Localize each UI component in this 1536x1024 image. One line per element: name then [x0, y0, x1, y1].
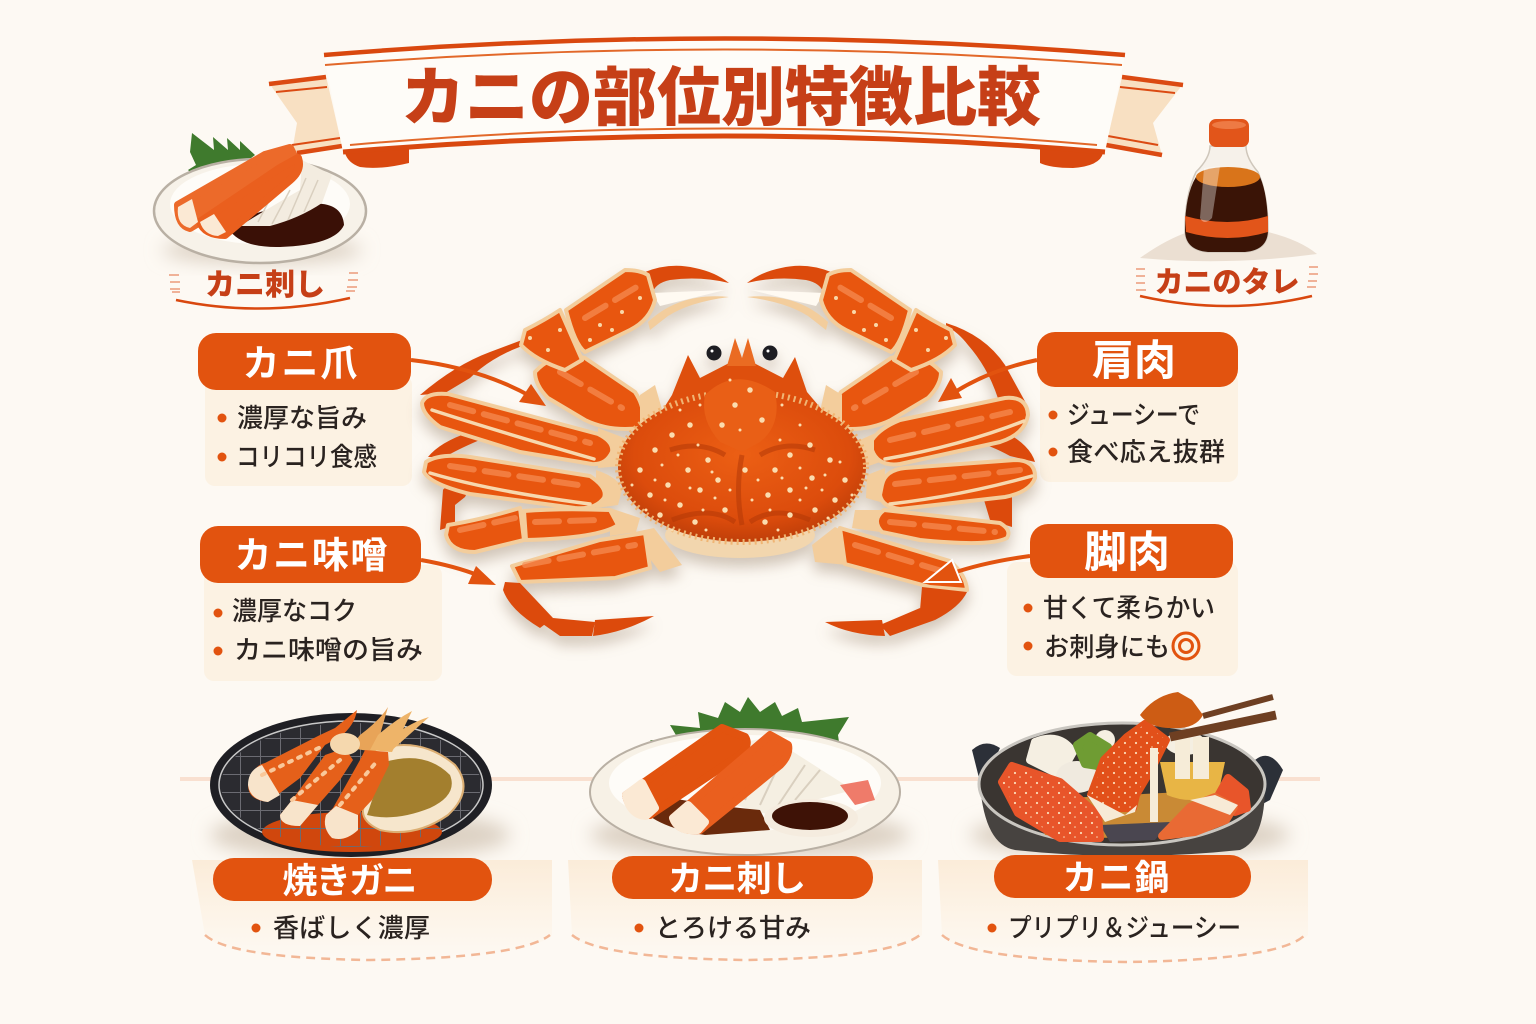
heading: kani claw: [198, 333, 411, 390]
title banner: [269, 38, 1183, 168]
panel: sashimi: とろける甘み: [655, 913, 811, 943]
panel: sashimi: [568, 856, 922, 960]
top left dish: kani sashimi: [154, 133, 366, 264]
heading: hot pot: カニ鍋: [1062, 859, 1170, 898]
dish: grilled crab: [210, 707, 510, 861]
icon: double circle: [1173, 633, 1199, 659]
crab: left legs: [422, 394, 682, 636]
crab: left claw: [521, 266, 729, 429]
heading: shoulder meat: 肩肉: [1092, 337, 1176, 384]
heading: leg meat: [1030, 524, 1233, 578]
label: kani sashimi top: [169, 269, 358, 309]
arrow: leg: [925, 556, 1030, 582]
crab illustration: [420, 266, 1035, 636]
panel: kani claw: [198, 333, 412, 486]
arrow: shoulder: [938, 360, 1037, 402]
title: カニの部位別特徴比較: [401, 62, 1041, 134]
panel: grilled crab: 香ばしく濃厚: [273, 913, 430, 943]
heading: sashimi: カニ刺し: [668, 860, 806, 899]
crab: right claw: [747, 266, 955, 429]
heading: crab miso: [200, 526, 421, 583]
panel: crab miso: [200, 526, 442, 681]
label: kani sauce: [1136, 266, 1318, 306]
panel: crab miso: 濃厚なコク: [232, 596, 357, 626]
panel: leg meat: [1007, 524, 1238, 676]
crab: right legs: [812, 398, 1035, 636]
panel: leg meat: お刺身にも: [1044, 632, 1170, 662]
heading: grilled crab: 焼きガニ: [282, 862, 418, 901]
heading: leg meat: 脚肉: [1084, 529, 1170, 577]
top right bottle: kani sauce: [1140, 119, 1317, 261]
panel: grilled crab: [192, 858, 552, 960]
arrow: claw: [411, 360, 546, 406]
label: kani sauce: カニのタレ: [1154, 266, 1300, 299]
dish: crab hot pot: [970, 692, 1290, 859]
dish: sashimi plate: [590, 697, 910, 859]
panel: shoulder meat: [1037, 332, 1238, 482]
panel: kani claw: 濃厚な旨み: [237, 403, 367, 433]
heading: hot pot: [994, 855, 1251, 898]
panel: hot pot: [938, 855, 1308, 962]
arrow: miso: [421, 560, 496, 585]
crab: carapace: [618, 338, 866, 558]
heading: crab miso: カニ味噌: [234, 535, 388, 576]
crab: rear thin limbs: [420, 323, 1035, 530]
heading: shoulder meat: [1037, 332, 1238, 387]
label: kani sashimi top: カニ刺し: [205, 269, 325, 302]
heading: grilled crab: [213, 858, 492, 901]
panel: kani claw: コリコリ食感: [236, 442, 377, 472]
heading: sashimi: [612, 856, 873, 899]
heading: kani claw: カニ爪: [242, 343, 358, 384]
panel: leg meat: 甘くて柔らかい: [1043, 593, 1215, 623]
panel: shoulder meat: 食べ応え抜群: [1067, 437, 1225, 467]
panel: hot pot: プリプリ＆ジューシー: [1008, 913, 1241, 943]
panel: crab miso: カニ味噌の旨み: [234, 635, 423, 665]
panel: shoulder meat: ジューシーで: [1067, 400, 1200, 430]
